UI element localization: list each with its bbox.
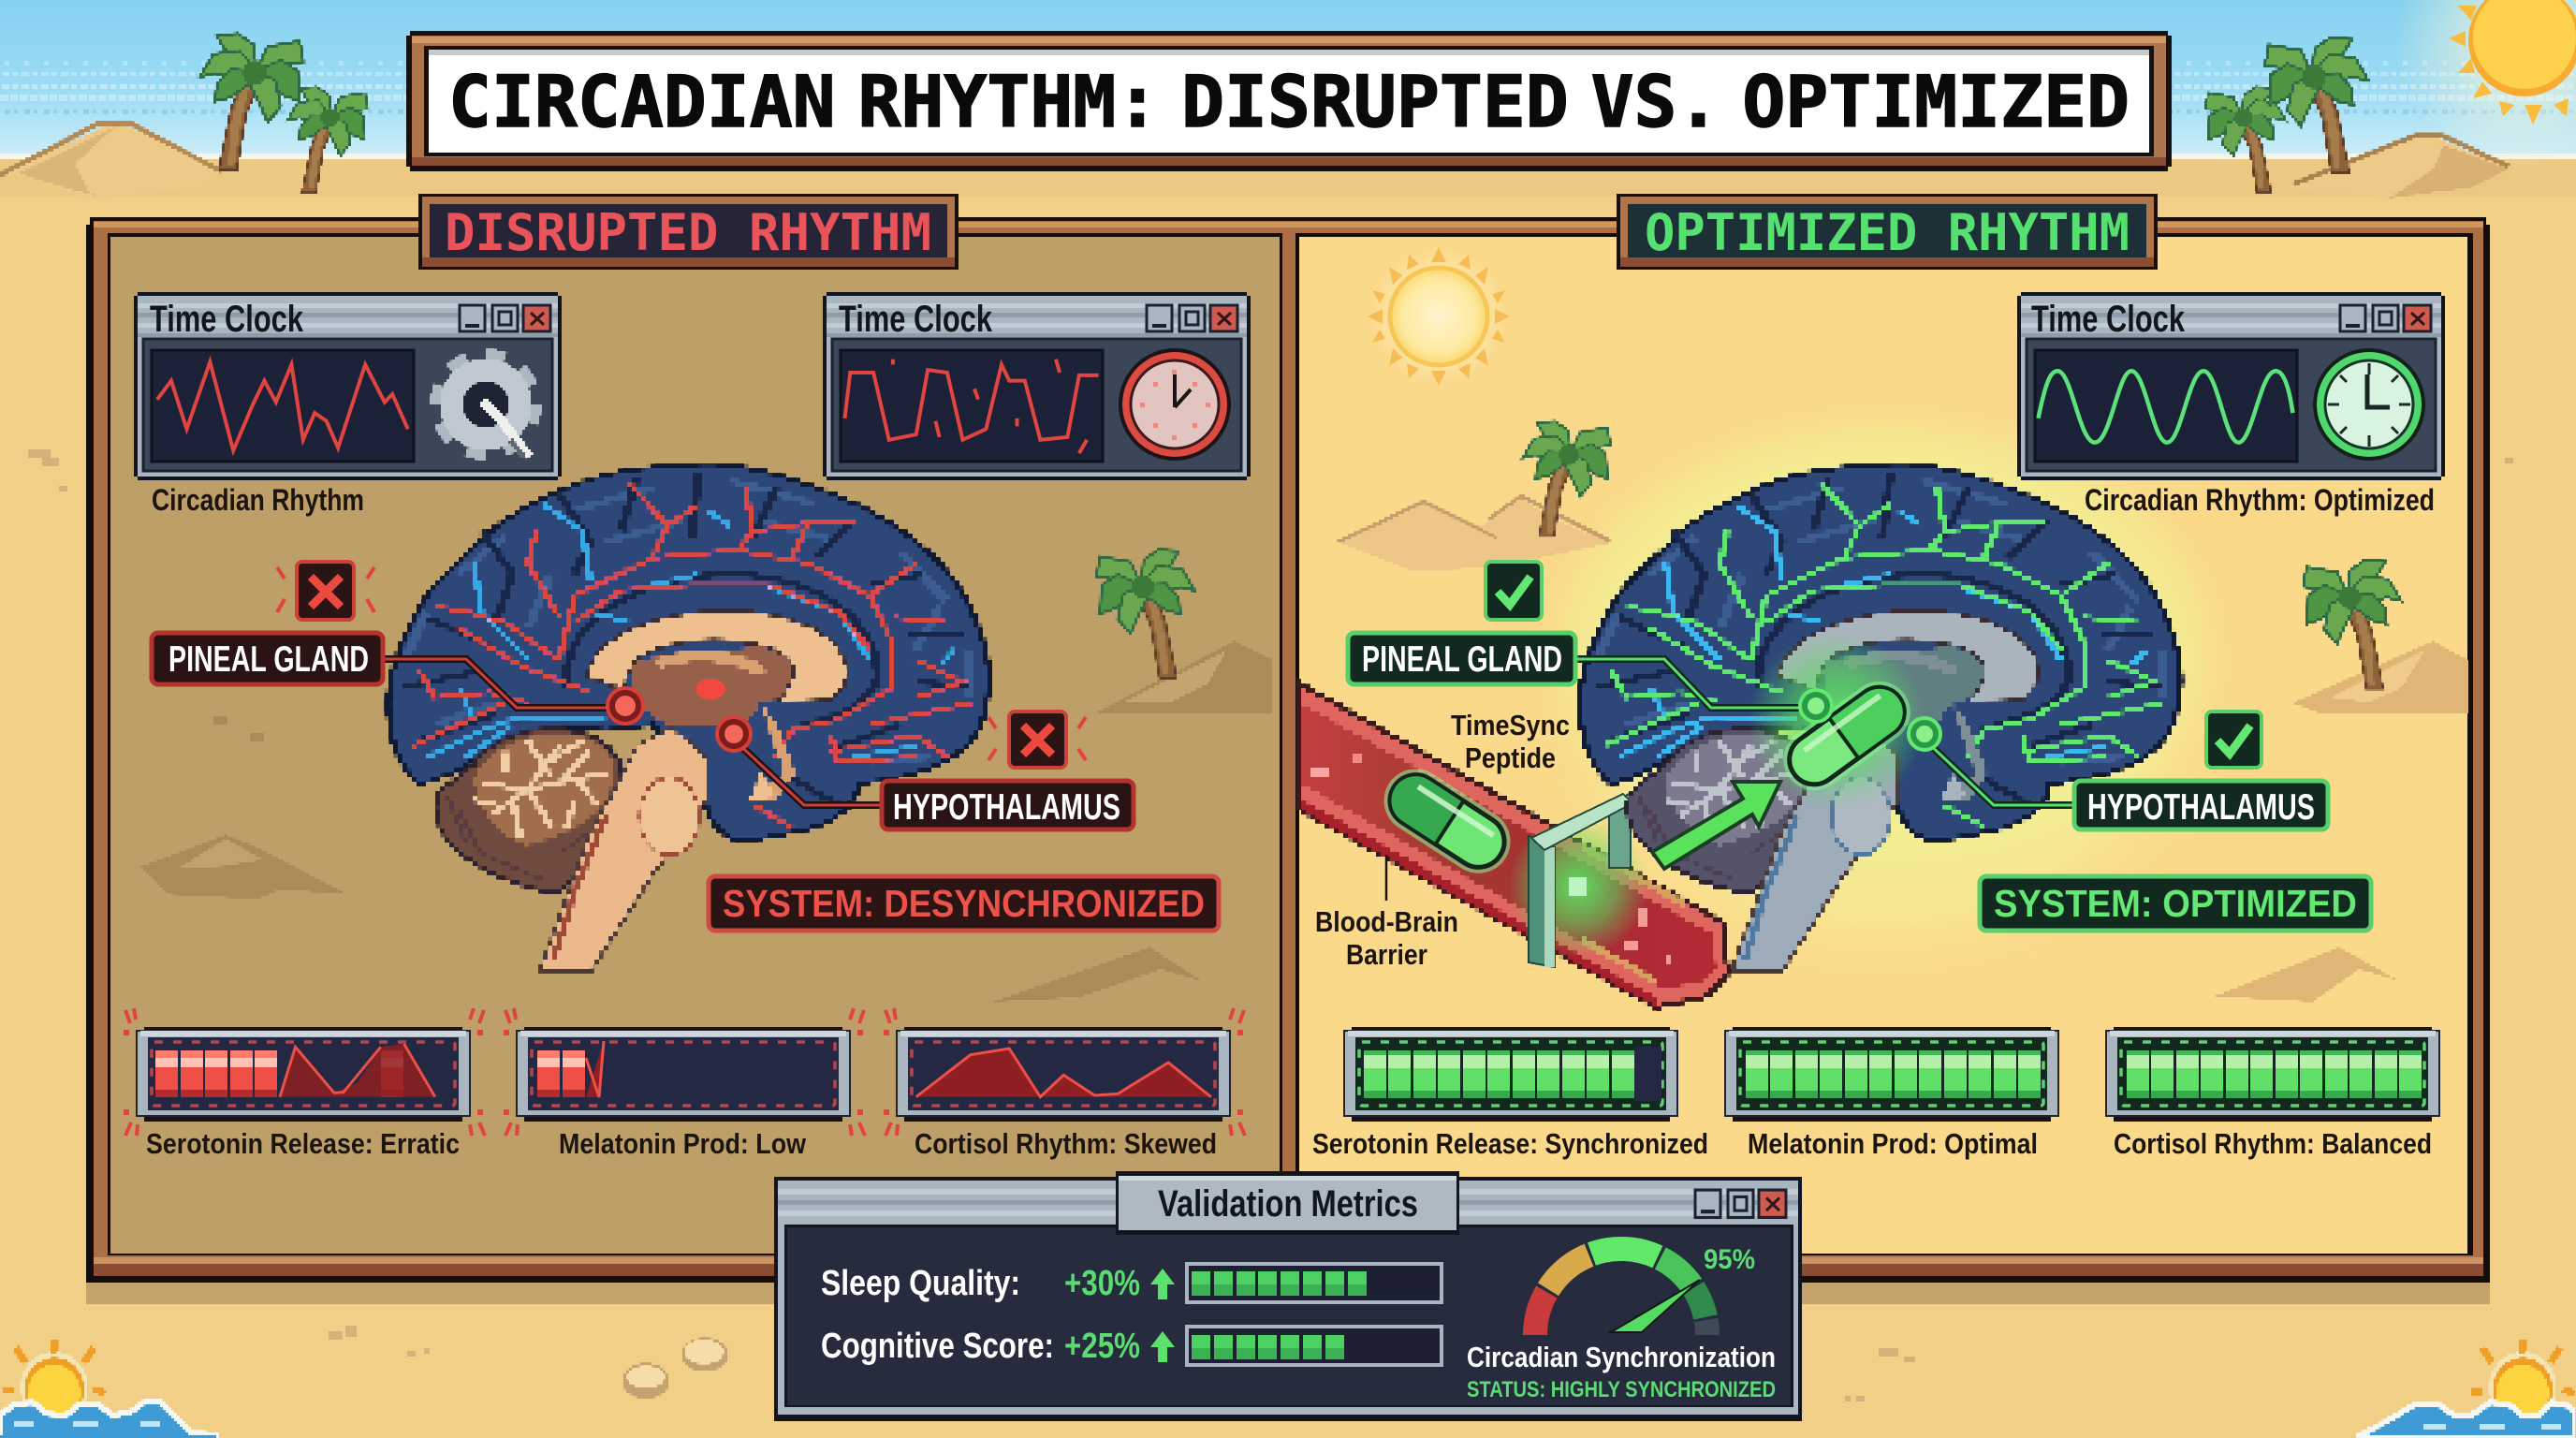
window: fragmented time clock: Time Clock <box>839 299 993 340</box>
icon: green clock <box>2313 348 2425 461</box>
label: timesync peptide <box>1451 709 1570 774</box>
dune: top left <box>0 122 221 198</box>
arrow: peptide into brain <box>1652 782 1780 869</box>
vessel: blood vessel with blood-brain barrier <box>1299 683 1728 1007</box>
panel: validation metrics window <box>774 1171 1802 1421</box>
glow: thalamus activity <box>1748 632 1925 810</box>
window buttons <box>1695 1190 1786 1217</box>
callout: hypothalamus, disrupted: HYPOTHALAMUS <box>893 787 1120 828</box>
callout: pineal gland, optimized <box>1348 633 1832 722</box>
label: Serotonin Release: Erratic <box>146 1127 460 1160</box>
panel: disrupted rhythm <box>110 237 1280 1254</box>
dune: top right <box>2284 134 2509 198</box>
marker: red thalamus spot <box>695 679 725 699</box>
label: timesync peptide: TimeSync <box>1451 709 1570 741</box>
brain: optimized, sagittal section <box>1580 464 2181 972</box>
metric: sleep quality <box>821 1264 1442 1303</box>
glow: peptide crossing barrier <box>1508 816 1648 957</box>
heading: optimized rhythm <box>1617 194 2158 270</box>
chart: fragmented rhythm line <box>844 360 1099 453</box>
halo: glow behind optimized brain <box>1509 393 2258 1002</box>
comparison frame <box>86 217 2490 1304</box>
icon: broken gear <box>437 356 534 457</box>
bar: serotonin release erratic <box>124 1008 485 1160</box>
window: optimized time clock <box>2017 292 2445 480</box>
metric: sleep quality: +30% <box>1064 1264 1140 1303</box>
palm tree: top left large <box>200 34 303 169</box>
callout: pineal gland, disrupted <box>152 633 643 724</box>
brain: disrupted, sagittal section <box>388 464 989 972</box>
bar: serotonin release synchronized <box>1312 1027 1708 1160</box>
palm tree: top right small <box>2205 87 2286 193</box>
label: Melatonin Prod: Low <box>559 1127 807 1160</box>
metric: sleep quality: Sleep Quality: <box>821 1264 1020 1303</box>
title banner <box>406 31 2172 171</box>
icon: peptide capsule in vessel <box>1371 756 1523 886</box>
icon: sun in optimized panel <box>1368 246 1510 387</box>
icon: sun and waves, bottom right <box>2359 1339 2576 1438</box>
chart: erratic rhythm line <box>157 362 408 450</box>
needle <box>1611 1280 1700 1332</box>
desert decoration: left panel <box>140 550 1273 1002</box>
bar: melatonin production optimal <box>1725 1027 2058 1160</box>
icon: sun, top right <box>2393 0 2576 171</box>
callout: pineal gland, optimized: PINEAL GLAND <box>1362 639 1562 680</box>
label: Melatonin Prod: Optimal <box>1748 1127 2038 1160</box>
metric: cognitive score: Cognitive Score: <box>821 1327 1054 1366</box>
metric: cognitive score <box>821 1327 1442 1366</box>
panel: optimized rhythm <box>1299 237 2467 1254</box>
bar: cortisol rhythm balanced <box>2106 1027 2439 1160</box>
icon: red clock <box>1119 348 1231 461</box>
callout: hypothalamus, optimized: HYPOTHALAMUS <box>2087 787 2315 828</box>
title text: CIRCADIAN RHYTHM: DISRUPTED VS. OPTIMIZED <box>448 60 2130 143</box>
icon: check mark, hypothalamus <box>2206 712 2261 768</box>
sand rocks and specks <box>28 449 2514 1401</box>
label: Cortisol Rhythm: Skewed <box>915 1127 1217 1160</box>
label: circadian rhythm: Circadian Rhythm <box>152 483 364 517</box>
window: erratic time clock with gear <box>134 292 562 480</box>
palm tree: top right large <box>2265 37 2368 173</box>
gauge: circadian synchronization: STATUS: HIGHLY SYNCHRONIZED <box>1467 1377 1776 1402</box>
status: system desynchronized: SYSTEM: DESYNCHRONIZED <box>723 882 1205 925</box>
gauge: circadian synchronization: Circadian Synchronization <box>1467 1341 1776 1373</box>
status: system optimized: SYSTEM: OPTIMIZED <box>1994 882 2357 925</box>
window: fragmented time clock <box>823 292 1251 480</box>
window: erratic time clock with gear: Time Clock <box>150 299 304 340</box>
icon: check mark, pineal <box>1486 562 1542 620</box>
icon: peptide capsule in brain <box>1771 669 1923 802</box>
label: timesync peptide: Peptide <box>1465 741 1556 774</box>
callout: hypothalamus, disrupted <box>717 717 1134 829</box>
label: Serotonin Release: Synchronized <box>1312 1127 1708 1160</box>
palm tree: top left small <box>287 87 368 193</box>
label: blood-brain barrier <box>1315 855 1458 971</box>
callout: pineal gland, disrupted: PINEAL GLAND <box>168 639 369 680</box>
label: Cortisol Rhythm: Balanced <box>2114 1127 2432 1160</box>
label: blood-brain barrier: Barrier <box>1346 938 1427 971</box>
heading: validation metrics: Validation Metrics <box>1158 1183 1418 1225</box>
desert decoration: right panel <box>1339 421 2467 1002</box>
icon: error mark, pineal <box>277 562 374 620</box>
bar: melatonin production low <box>504 1008 865 1160</box>
chart: smooth sine rhythm <box>2038 371 2292 443</box>
heading: disrupted rhythm: DISRUPTED RHYTHM <box>445 203 931 262</box>
callout: hypothalamus, optimized <box>1909 718 2328 829</box>
heading: optimized rhythm: OPTIMIZED RHYTHM <box>1645 203 2130 262</box>
label: blood-brain barrier: Blood-Brain <box>1315 905 1458 938</box>
label: circadian rhythm optimized: Circadian Rhythm: Optimized <box>2085 483 2435 517</box>
icon: error mark, hypothalamus <box>988 712 1086 768</box>
metric: cognitive score: +25% <box>1064 1327 1140 1366</box>
window: optimized time clock: Time Clock <box>2031 299 2186 340</box>
bar: cortisol rhythm skewed <box>884 1008 1245 1160</box>
icon: sun and waves, bottom left <box>0 1339 217 1438</box>
value: 95% <box>1704 1244 1755 1275</box>
icon: barrier gate <box>1529 793 1632 967</box>
gauge: circadian synchronization <box>1467 1244 1776 1402</box>
